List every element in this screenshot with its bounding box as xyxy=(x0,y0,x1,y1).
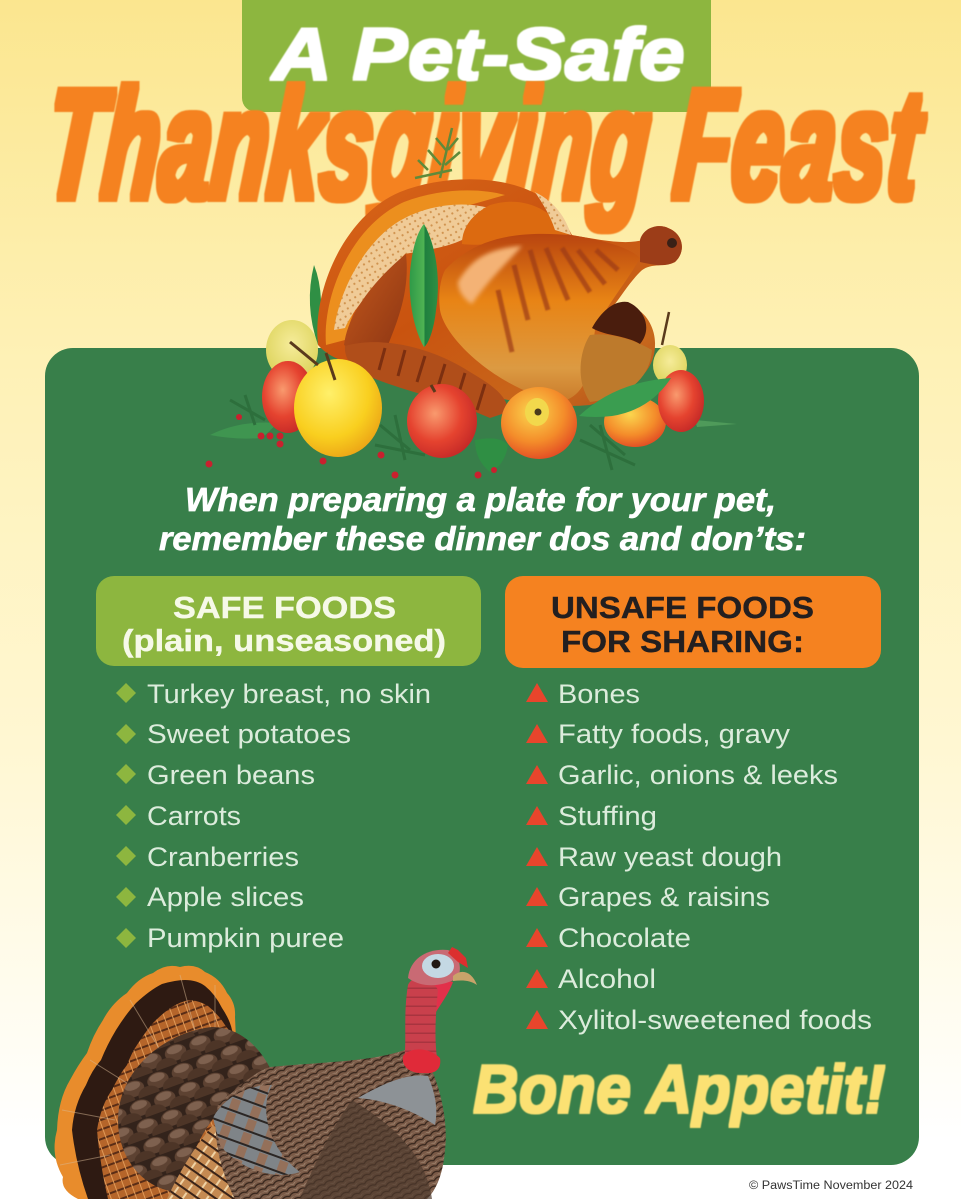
item: alcohol: Alcohol xyxy=(558,964,656,994)
tail feather lines xyxy=(60,975,215,1165)
upper wing xyxy=(344,254,407,351)
beak xyxy=(453,972,477,985)
apple: small red xyxy=(407,384,477,458)
intro text xyxy=(159,481,806,557)
eye xyxy=(432,960,440,968)
item: bones xyxy=(526,679,640,709)
safe foods header: SAFE FOODS xyxy=(173,590,396,625)
unsafe foods list xyxy=(526,679,872,1035)
turkey body xyxy=(317,179,682,406)
outer rim orange xyxy=(326,190,505,345)
illustration: roast turkey with apples xyxy=(206,128,737,478)
item: fatty foods: Fatty foods, gravy xyxy=(558,719,791,749)
item: pumpkin puree: Pumpkin puree xyxy=(147,923,344,953)
unsafe foods header: FOR SHARING: xyxy=(561,624,804,659)
thigh sheen xyxy=(458,246,522,304)
item: grapes: Grapes & raisins xyxy=(558,882,770,912)
item: carrots: Carrots xyxy=(147,801,241,831)
rosemary xyxy=(230,395,635,470)
grey chest sheen xyxy=(358,1075,436,1125)
dark wing scale feathers xyxy=(118,1027,270,1192)
tail fan brown feathers xyxy=(97,1000,240,1199)
illustration: live turkey xyxy=(55,947,477,1199)
safe foods list xyxy=(116,679,431,953)
copyright: © PawsTime November 2024 xyxy=(749,1180,914,1192)
apple: orange front xyxy=(501,387,577,459)
rosemary sprig xyxy=(415,128,460,178)
crest xyxy=(462,202,570,245)
item: xylitol: Xylitol-sweetened foods xyxy=(558,1005,872,1035)
intro text: remember these dinner dos and don’ts: xyxy=(159,520,806,557)
face xyxy=(422,954,454,978)
drumstick end xyxy=(640,226,682,265)
unsafe foods header xyxy=(505,576,881,668)
header tab: A Pet-Safe xyxy=(242,0,711,112)
item: stuffing: Stuffing xyxy=(558,801,657,831)
header tab: A Pet-Safe: A Pet-Safe xyxy=(270,13,685,95)
thigh xyxy=(439,234,640,402)
central leaf xyxy=(410,224,438,347)
item: cranberries: Cranberries xyxy=(147,842,299,872)
lower wing xyxy=(345,342,508,418)
apple: right red xyxy=(658,370,704,432)
comb xyxy=(448,947,468,968)
item: chocolate: Chocolate xyxy=(558,923,691,953)
green content panel xyxy=(45,348,919,1165)
red berries xyxy=(206,414,497,478)
body xyxy=(216,1050,446,1199)
apple: big yellow xyxy=(294,359,382,457)
item: stuffing xyxy=(526,801,657,831)
cavity xyxy=(592,302,646,344)
apple: left red xyxy=(262,361,314,433)
safe foods header: (plain, unseasoned) xyxy=(122,623,446,658)
leaf right xyxy=(579,378,671,417)
apple: right orange xyxy=(604,397,666,447)
tagline: Bone Appetit: Bone Appetit! xyxy=(473,1051,886,1127)
item: bones: Bones xyxy=(558,679,640,709)
low leaves xyxy=(210,422,278,439)
safe foods header xyxy=(96,576,481,666)
grey wing bar xyxy=(213,1085,300,1175)
thigh shadow streaks xyxy=(498,248,618,352)
item: garlic: Garlic, onions & leeks xyxy=(558,760,838,790)
item: apple slices: Apple slices xyxy=(147,882,304,912)
unsafe foods header: UNSAFE FOODS xyxy=(551,590,814,625)
item: green beans: Green beans xyxy=(147,760,315,790)
item: raw yeast dough: Raw yeast dough xyxy=(558,842,782,872)
hip xyxy=(581,334,652,402)
dark flank xyxy=(300,1100,432,1199)
head xyxy=(408,950,460,985)
back apples xyxy=(266,320,318,380)
tail fan orange tips xyxy=(55,966,240,1199)
neck xyxy=(404,978,438,1067)
wattle xyxy=(403,1049,440,1073)
title: Thanksgiving Feast: Thanksgiving Feast xyxy=(40,58,931,232)
throat xyxy=(428,975,453,1012)
lighter breast skin xyxy=(334,205,503,330)
intro text: When preparing a plate for your pet, xyxy=(185,481,776,518)
tail fan dark band xyxy=(72,980,240,1199)
item: turkey breast: Turkey breast, no skin xyxy=(147,679,431,709)
item: sweet potatoes: Sweet potatoes xyxy=(147,719,351,749)
back leaf xyxy=(310,265,321,345)
lower tail stripes xyxy=(167,1125,300,1199)
item: alcohol xyxy=(526,964,656,994)
